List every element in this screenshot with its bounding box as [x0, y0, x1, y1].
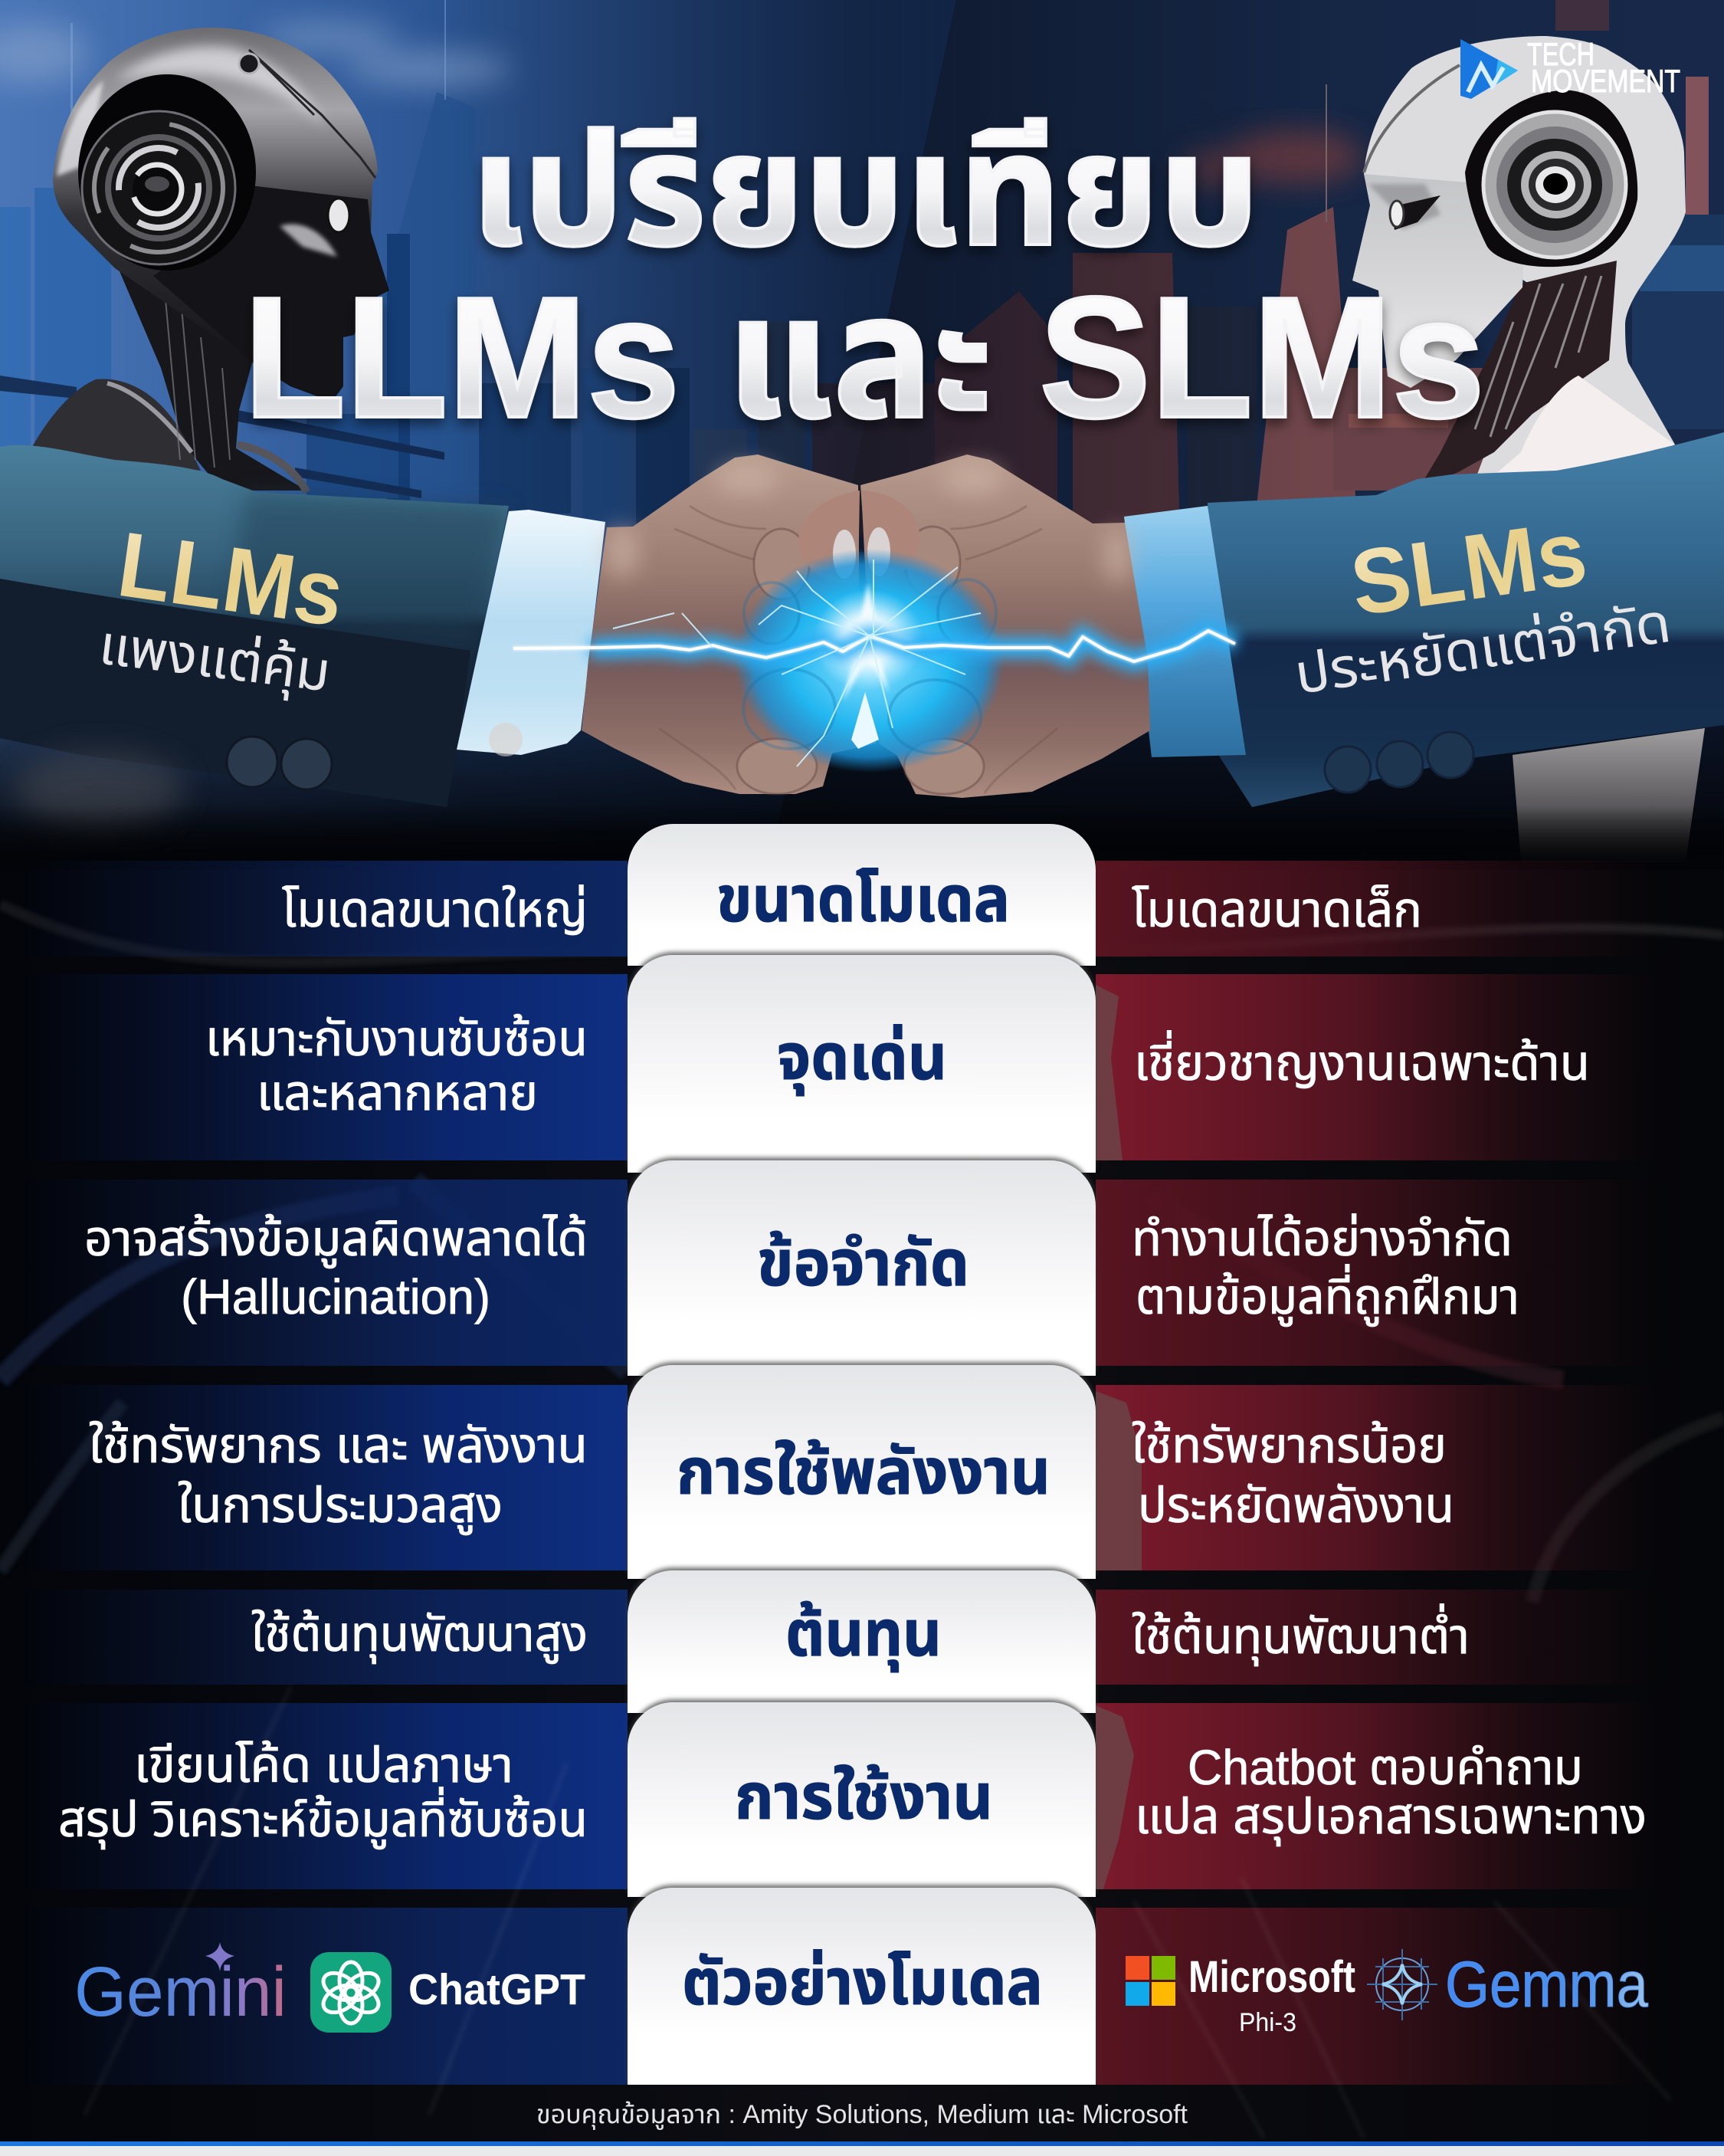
- eye: [328, 199, 349, 232]
- shoulder: [29, 379, 201, 471]
- SLMs tagline: ประหยัดแต่จำกัด: [1291, 592, 1674, 706]
- title line 2: LLMs และ SLMs: [244, 261, 1485, 454]
- finger shapes: [737, 527, 984, 794]
- small camera port: [239, 54, 259, 74]
- Phi-3 label: Phi-3: [1239, 2008, 1296, 2037]
- left column text: LLMs: อาจสร้างข้อมูลผิดพลาดได้: [84, 1211, 588, 1268]
- cuff button: [489, 723, 523, 756]
- left column text: LLMs: ใช้ทรัพยากร และ พลังงาน: [89, 1418, 588, 1473]
- left column text: LLMs: ใช้ต้นทุนพัฒนาสูง: [251, 1606, 588, 1664]
- Microsoft wordmark: Microsoft: [1188, 1952, 1355, 2002]
- right sleeve: [1208, 432, 1724, 807]
- right column text: SLMs: โมเดลขนาดเล็ก: [1132, 882, 1422, 937]
- centre darkening: [429, 0, 1303, 552]
- logo wordmark: TECH: [1527, 36, 1595, 72]
- hero background: blue and red futuristic cities: [0, 0, 1724, 866]
- robot: white SLM head: [1352, 36, 1686, 491]
- logo: Tech Movement: [1460, 36, 1680, 99]
- sleeve label: LLMs: [96, 513, 349, 706]
- ChatGPT icon: [310, 1952, 392, 2033]
- background: lower dark area: [0, 766, 1724, 2156]
- card: cost: [628, 1570, 1096, 1713]
- sleeve label: SLMs: [1291, 500, 1674, 706]
- source credit: ขอบคุณข้อมูลจาก : Amity Solutions, Medium และ Microsoft: [536, 2100, 1188, 2130]
- right column bands: SLMs: [1096, 861, 1724, 2085]
- white silhouette back: [1364, 36, 1686, 491]
- lower fade: [0, 805, 1724, 870]
- right column text: SLMs: ทำงานได้อย่างจำกัด: [1132, 1211, 1513, 1266]
- right column text: SLMs: ตามข้อมูลที่ถูกฝึกมา: [1136, 1264, 1519, 1327]
- card: limitations: [628, 1160, 1096, 1376]
- center column headings: ข้อจำกัด: [757, 1227, 969, 1299]
- center column headings: ต้นทุน: [785, 1597, 942, 1672]
- lower face shade: [153, 184, 389, 402]
- cable lines: [165, 291, 230, 468]
- thumbs: [798, 491, 919, 583]
- hand creases: [659, 506, 1057, 793]
- title: [244, 103, 1485, 454]
- center column headings: การใช้งาน: [735, 1761, 993, 1833]
- title line 1: เปรียบเทียบ: [470, 103, 1260, 278]
- right column text: SLMs: Chatbot ตอบคำถาม: [1188, 1740, 1583, 1795]
- logo icon: [1460, 39, 1518, 99]
- left fist: [582, 454, 877, 794]
- decorative light streaks: [84, 1686, 1670, 2138]
- side highlight: [57, 80, 103, 176]
- seam: [1364, 65, 1460, 172]
- card: examples: [628, 1888, 1096, 2085]
- LLMs heading: LLMs: [112, 513, 349, 646]
- nails: [833, 527, 890, 579]
- logo: Tech Movement: MOVEMENT: [1531, 63, 1680, 99]
- face: [1352, 174, 1525, 388]
- main lightning: [513, 631, 1235, 661]
- right column text: SLMs: เชี่ยวชาญงานเฉพาะด้าน: [1134, 1030, 1590, 1091]
- fade to dark: [0, 552, 1724, 866]
- cheek highlight: [280, 224, 337, 257]
- sleeve fold: [0, 579, 470, 807]
- center column headings: การใช้พลังงาน: [677, 1436, 1050, 1508]
- shoulder light: [1494, 376, 1675, 491]
- logo: ChatGPT: [310, 1952, 585, 2033]
- arm: left LLM sleeve with cuff: [0, 445, 605, 807]
- skull highlight: [115, 46, 326, 126]
- ear housing: [1465, 90, 1637, 267]
- lightning glow: [590, 631, 1235, 661]
- ChatGPT wordmark: ChatGPT: [408, 1965, 585, 2014]
- right column text: SLMs: ประหยัดพลังงาน: [1138, 1478, 1454, 1533]
- sleeve shading: [230, 492, 509, 651]
- right buildings: [812, 0, 1724, 537]
- left column text: LLMs: เขียนโค้ด แปลภาษา: [134, 1738, 513, 1793]
- left column text: LLMs: ในการประมวลสูง: [178, 1478, 503, 1535]
- white robot body: [1513, 728, 1705, 862]
- logo: Gemma: [1367, 1948, 1648, 2020]
- left column text: LLMs: เหมาะกับงานซับซ้อน: [205, 1011, 588, 1066]
- left column text: LLMs: และหลากหลาย: [257, 1065, 538, 1121]
- left column bands: LLMs: [0, 861, 628, 2085]
- lit finger outlines: [743, 579, 996, 753]
- bottom stripe: [0, 2141, 1724, 2156]
- right buttons: [1325, 732, 1473, 793]
- ear housing: [78, 74, 256, 271]
- LLMs tagline: แพงแต่คุ้ม: [96, 614, 334, 706]
- right column text: SLMs: [1132, 882, 1647, 1846]
- center column headings: จุดเด่น: [777, 1021, 947, 1096]
- left column text: LLMs: โมเดลขนาดใหญ่: [282, 882, 588, 937]
- left sleeve: [0, 445, 509, 807]
- left cuff: [457, 510, 605, 755]
- ear rings: [82, 111, 235, 264]
- right clouds: [1180, 130, 1364, 185]
- pink silhouette patches on right bands: [1096, 985, 1142, 1889]
- Gemini star: [205, 1942, 234, 1971]
- panel line: [249, 50, 375, 178]
- right fist: [860, 454, 1150, 798]
- card: strengths: [628, 955, 1096, 1173]
- neck and cables: [115, 261, 306, 491]
- card: energy use: [628, 1365, 1096, 1579]
- hand highlights: [605, 464, 1131, 583]
- center column headings: [677, 863, 1050, 2018]
- right cuff: [1124, 506, 1246, 757]
- left column text: LLMs: (Hallucination): [181, 1269, 490, 1324]
- red city side: [769, 0, 1724, 866]
- head shell: [53, 28, 389, 402]
- core flash: [813, 589, 923, 691]
- neck wires: [1475, 276, 1601, 437]
- card: usage: [628, 1702, 1096, 1897]
- Microsoft squares: [1126, 1956, 1175, 2006]
- Gemma wordmark: Gemma: [1445, 1948, 1648, 2020]
- ear disc: [1483, 112, 1626, 258]
- right column text: SLMs: ใช้ต้นทุนพัฒนาต่ำ: [1132, 1603, 1470, 1666]
- body remnants below sleeves: [0, 728, 1724, 870]
- black robot body: [15, 751, 184, 828]
- right column text: SLMs: ใช้ทรัพยากรน้อย: [1132, 1418, 1447, 1473]
- arm: right SLM sleeve with cuff: [1124, 432, 1724, 807]
- left clouds: [0, 23, 513, 86]
- core star: [824, 582, 916, 701]
- center column headings: ขนาดโมเดล: [716, 863, 1010, 935]
- brow shade: [1368, 184, 1440, 230]
- center column headings: ตัวอย่างโมเดล: [682, 1946, 1043, 2018]
- card: model size: [628, 824, 1096, 966]
- bottom gap light: [851, 692, 879, 749]
- eye: [1391, 195, 1440, 230]
- blue sky side: [0, 0, 956, 866]
- right column text: SLMs: แปล สรุปเอกสารเฉพาะทาง: [1135, 1789, 1647, 1846]
- Gemini wordmark: Gemini: [74, 1953, 287, 2031]
- left column text: LLMs: สรุป วิเคราะห์ข้อมูลที่ซับซ้อน: [58, 1787, 588, 1849]
- center column cards: [628, 824, 1096, 2085]
- logo: Microsoft Phi-3: [1126, 1952, 1355, 2037]
- electric glow: [735, 549, 1005, 773]
- left column text: LLMs: [58, 882, 588, 1849]
- Gemma icon: [1367, 1949, 1437, 2020]
- background: road and car shapes behind rows: [0, 904, 1724, 1602]
- fists with electric spark: [513, 454, 1235, 798]
- left buildings: [0, 0, 805, 537]
- left buttons: [227, 737, 332, 789]
- lightning branches: [613, 560, 981, 766]
- SLMs heading: SLMs: [1345, 500, 1593, 635]
- neck: [1418, 261, 1617, 491]
- logo: Gemini: [74, 1942, 287, 2031]
- eye lens: [1390, 201, 1404, 227]
- robot: black LLM head: [29, 28, 389, 492]
